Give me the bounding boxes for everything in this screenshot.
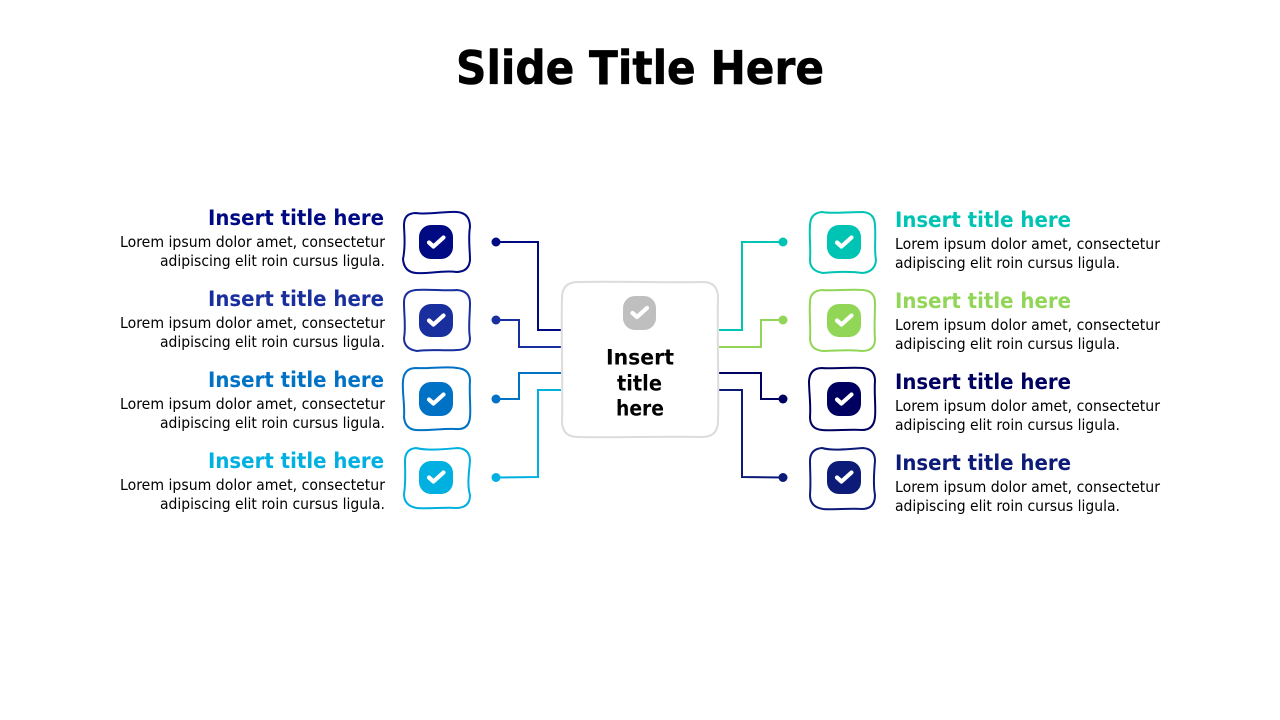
right 2 icon [810, 290, 875, 351]
left 1 icon [403, 212, 470, 273]
center panel frame [562, 282, 718, 437]
center title: title [617, 372, 662, 396]
left 4 text [120, 449, 386, 513]
left 3 text: Insert title here [208, 368, 384, 393]
right 2 text [895, 289, 1161, 353]
left 4 icon [404, 448, 470, 508]
left 2 text: Lorem ipsum dolor amet, consectetur [120, 314, 386, 332]
right 4 text [895, 451, 1161, 515]
right 4 text: Lorem ipsum dolor amet, consectetur [895, 478, 1161, 496]
item: left 2 [120, 287, 470, 351]
center title [606, 346, 674, 422]
center title: here [616, 396, 664, 422]
left 3 text: adipiscing elit roin cursus ligula. [160, 414, 385, 432]
right 3 text: adipiscing elit roin cursus ligula. [895, 416, 1120, 434]
connector: left 1 [492, 238, 561, 330]
left 3 text: Lorem ipsum dolor amet, consectetur [120, 395, 386, 413]
center panel [562, 282, 718, 437]
left 2 text: adipiscing elit roin cursus ligula. [160, 333, 385, 351]
left 2 text [120, 287, 386, 351]
connector: right 2 [719, 316, 788, 347]
title: Slide Title Here [456, 41, 824, 95]
right 1 text: Lorem ipsum dolor amet, consectetur [895, 235, 1161, 253]
left 3 icon [403, 367, 470, 430]
item: left 3 [120, 367, 470, 432]
left 3 text [120, 368, 386, 432]
right 2 text: Lorem ipsum dolor amet, consectetur [895, 316, 1161, 334]
item: right 2 [810, 289, 1161, 353]
right 3 text [895, 370, 1161, 434]
left 4 text: adipiscing elit roin cursus ligula. [160, 495, 385, 513]
left 1 text [120, 206, 386, 270]
right 1 text [895, 208, 1161, 272]
connector: left 3 [492, 373, 561, 404]
left 1 text: Insert title here [208, 206, 384, 231]
right 2 text: Insert title here [895, 289, 1071, 314]
right 4 text: Insert title here [895, 451, 1071, 476]
right 4 text: adipiscing elit roin cursus ligula. [895, 497, 1120, 515]
right 3 text: Insert title here [895, 370, 1071, 395]
right 2 text: adipiscing elit roin cursus ligula. [895, 335, 1120, 353]
connector: left 2 [492, 316, 561, 347]
left 1 text: adipiscing elit roin cursus ligula. [160, 252, 385, 270]
item: left 4 [120, 448, 470, 513]
item: right 4 [810, 448, 1161, 515]
right 1 text: adipiscing elit roin cursus ligula. [895, 254, 1120, 272]
item: right 1 [810, 208, 1161, 273]
left 2 text: Insert title here [208, 287, 384, 312]
icon: center check [623, 296, 656, 330]
right 3 icon [809, 368, 875, 430]
connector: right 3 [719, 373, 788, 404]
connector: right 4 [719, 390, 788, 482]
left 4 text: Insert title here [208, 449, 384, 474]
connector: right 1 [719, 238, 788, 330]
left 1 text: Lorem ipsum dolor amet, consectetur [120, 233, 386, 251]
right 1 icon [810, 212, 876, 273]
connector: left 4 [492, 390, 561, 482]
center title: Insert [606, 346, 674, 370]
right 4 icon [810, 448, 875, 509]
right 3 text: Lorem ipsum dolor amet, consectetur [895, 397, 1161, 415]
left 4 text: Lorem ipsum dolor amet, consectetur [120, 476, 386, 494]
left 2 icon [404, 290, 470, 351]
item: left 1 [120, 206, 470, 273]
right 1 text: Insert title here [895, 208, 1071, 233]
item: right 3 [809, 368, 1161, 434]
